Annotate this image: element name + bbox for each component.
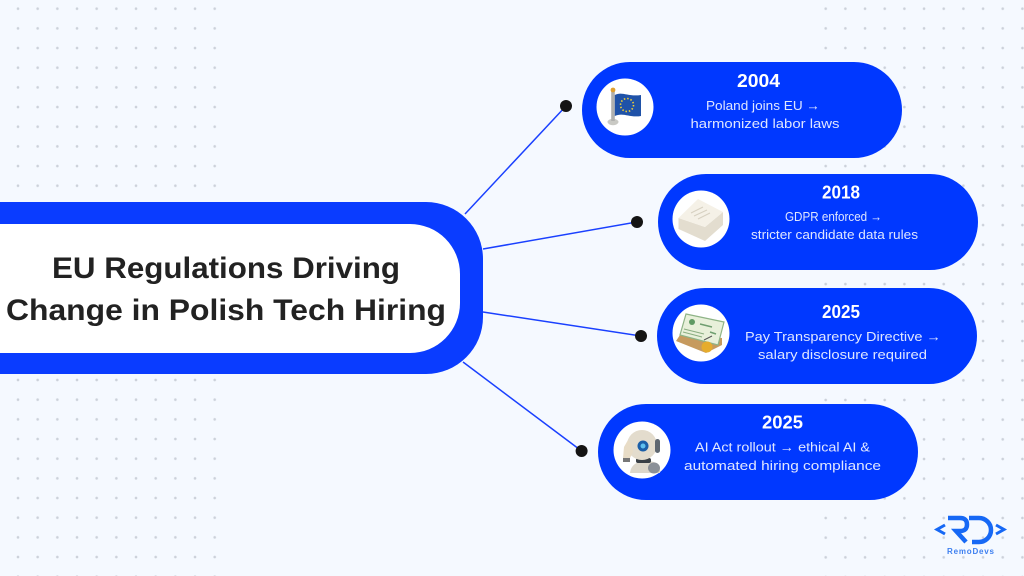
connector: 2018 [483, 216, 643, 249]
panel: 2025 pay transparency [657, 288, 977, 384]
title [6, 252, 446, 327]
title: Change in Polish Tech Hiring [6, 294, 446, 327]
text: 2018: 2018 [822, 182, 860, 202]
text: 2025 pay [745, 302, 941, 362]
text: 2004 [690, 71, 840, 131]
text: 2004: harmonized labor laws [690, 116, 840, 131]
connector lines and endpoint dots [463, 100, 647, 457]
icon: certificate [672, 304, 730, 362]
panel: 2004 [582, 62, 902, 158]
text: 2018: GDPR enforced → [785, 209, 882, 224]
panel: 2018 [658, 174, 978, 270]
text: 2025 AI: AI Act rollout → ethical AI & [695, 440, 870, 454]
connector: 2025 AI act [463, 362, 588, 457]
title: EU Regulations Driving [52, 252, 400, 285]
panel: central title [0, 202, 483, 374]
text: 2025 AI: automated hiring compliance [684, 458, 881, 473]
text: 2025 AI: 2025 [762, 412, 803, 432]
logo: RemoDevs [937, 518, 1004, 556]
text: 2025 pay: 2025 [822, 302, 860, 322]
connector: 2025 pay transparency [483, 312, 647, 342]
text: 2004: Poland joins EU → [706, 98, 820, 113]
text: 2025 AI [684, 412, 881, 473]
panel: 2025 AI act [598, 404, 918, 500]
logo: RemoDevs: RemoDevs [947, 547, 995, 556]
icon: EU flag [596, 78, 654, 136]
text: 2025 pay: Pay Transparency Directive → [745, 329, 941, 344]
text: 2018 [751, 182, 919, 242]
text: 2004: 2004 [737, 71, 780, 91]
icon: robot [614, 422, 670, 478]
text: 2018: stricter candidate data rules [751, 227, 919, 242]
icon: paper stack [672, 190, 730, 248]
text: 2025 pay: salary disclosure required [758, 347, 927, 362]
connector: 2004 [465, 100, 572, 214]
